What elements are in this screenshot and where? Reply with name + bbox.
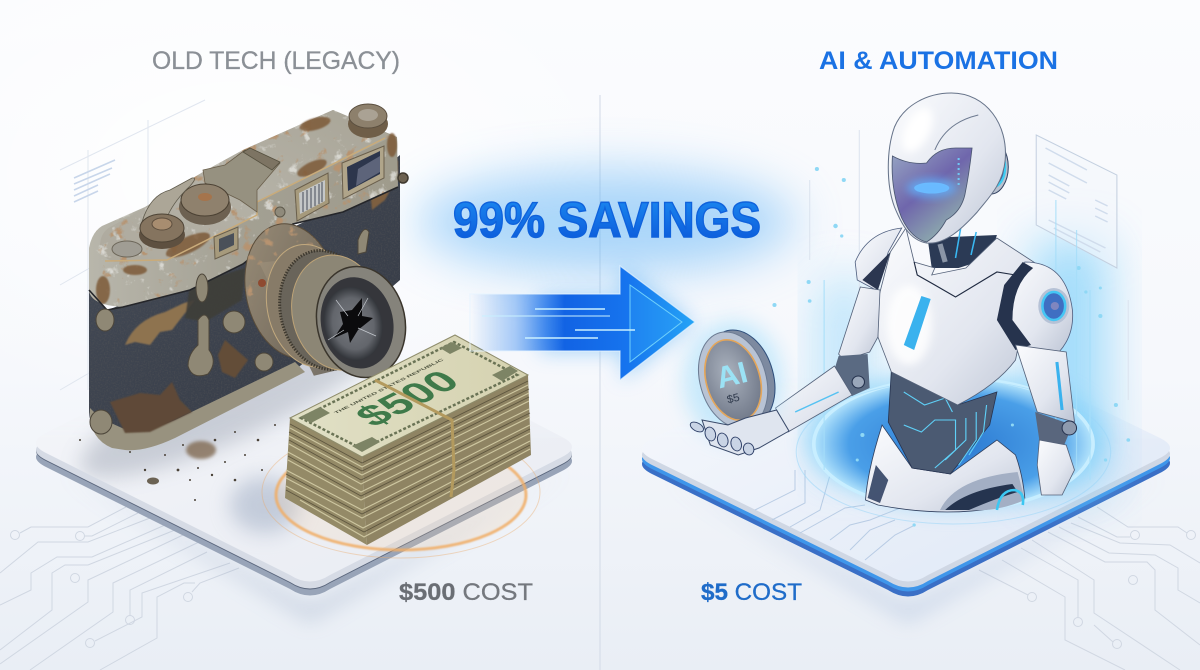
visor [892,148,972,242]
robot [683,93,1077,512]
leather grain [89,155,400,448]
left shoulder joint [862,252,890,290]
arrow head inner [630,285,682,362]
neck [928,235,997,268]
helmet highlight [896,103,939,157]
viewfinder window [342,146,384,199]
coin value label: $5 [726,392,741,406]
arrow core glow [540,315,668,329]
upper left arm [839,287,880,360]
background glow: savings [416,170,796,274]
abdomen [888,370,997,474]
robot aura [806,240,1106,510]
screw [275,207,285,217]
camera bottom plate [90,362,305,450]
stack left side [285,418,367,545]
chest seam [914,262,1016,297]
hip joint [940,472,1025,510]
hip dark sweep [945,484,1018,510]
top dial [179,184,231,225]
rangefinder window [295,173,329,221]
left platform [36,446,572,596]
open hand [689,410,789,456]
right hand [1037,440,1074,495]
hips [866,425,1025,512]
rubber band [375,380,454,497]
layered edges [286,385,530,537]
right platform shadow [665,475,1165,622]
right forearm [1016,345,1074,422]
camera front strip [89,110,398,307]
visor side lights [958,158,960,186]
camera and money shadows on plate [75,364,365,541]
accessory clip [243,148,280,170]
shutter button [139,214,185,249]
background sheen [0,0,800,500]
advance lever [142,178,195,222]
left elbow [832,354,870,396]
robot head [888,93,1008,243]
rust patches on body [110,160,398,433]
mid barrel [255,231,393,383]
body lugs and levers [90,229,369,434]
chest light bar [904,296,931,350]
brass edge line [105,138,385,261]
helmet [888,93,1005,243]
left platform shadow [60,470,570,622]
worn silver texture [89,110,398,307]
banknote value: $500 [345,364,469,433]
rust texture [89,110,398,307]
neck circuits [940,228,976,262]
coin rim [695,322,785,434]
title: old tech: OLD TECH (LEGACY) [152,47,400,75]
stack right side [362,375,531,545]
abdomen circuits [904,392,987,468]
right arm shoulder [1006,262,1073,352]
shoulder ring emblem [1038,288,1069,324]
coin glow [683,320,783,440]
rear of lens barrel [233,215,351,367]
arrow speed lines [482,309,668,338]
camera top face [100,110,393,262]
camera body leatherette [89,155,400,448]
banknote corners [300,342,518,452]
right wrist [1035,412,1077,445]
chest highlight [886,285,932,365]
circuit traces: bottom right [979,507,1200,670]
arrow body [470,266,695,380]
portal [796,378,1111,524]
lens front [306,258,416,386]
left forearm [776,366,852,432]
top banknote [290,335,528,457]
chest [878,228,1035,405]
shattered glass [328,298,376,343]
small button [112,241,142,257]
rewind knob [348,104,388,138]
shoulder left [855,228,902,290]
hip ring [997,490,1023,510]
arrow [470,265,695,380]
camera [89,104,416,450]
coin [683,320,785,440]
rust accents [96,114,397,304]
coin face [688,324,778,436]
orange halo ring [262,426,540,558]
floating particles [772,167,1130,527]
coin AI label: AI [713,355,751,395]
title: AI and automation: AI & AUTOMATION [819,47,1058,75]
plate circuit traces [755,470,915,560]
arrow glow [540,265,695,380]
cost label: old tech: $500 COST [399,579,533,606]
forearm light [1057,362,1062,410]
background schematic: left [60,100,205,390]
forearm light [795,392,839,412]
frame counter window [214,227,238,259]
headline: savings: 99% SAVINGS [453,192,761,248]
helmet seam [935,115,978,150]
earpiece [973,140,1008,194]
banknote caption: THE UNITED STATES REPUBLIC [334,358,446,415]
right platform [642,422,1170,596]
lens rust texture [233,215,351,367]
eye [914,182,949,194]
hot shoe [203,150,280,212]
circuit traces: bottom left [0,507,239,670]
strap lug [398,173,408,183]
shoulder joint shadow [997,262,1033,350]
vertical light streaks [810,130,1128,480]
cost label: AI: $5 COST [701,579,802,606]
centre divider line [599,95,601,670]
money stack [285,335,531,545]
hip dark band [868,465,888,503]
dust and debris [79,424,276,501]
hologram document [1036,135,1117,268]
